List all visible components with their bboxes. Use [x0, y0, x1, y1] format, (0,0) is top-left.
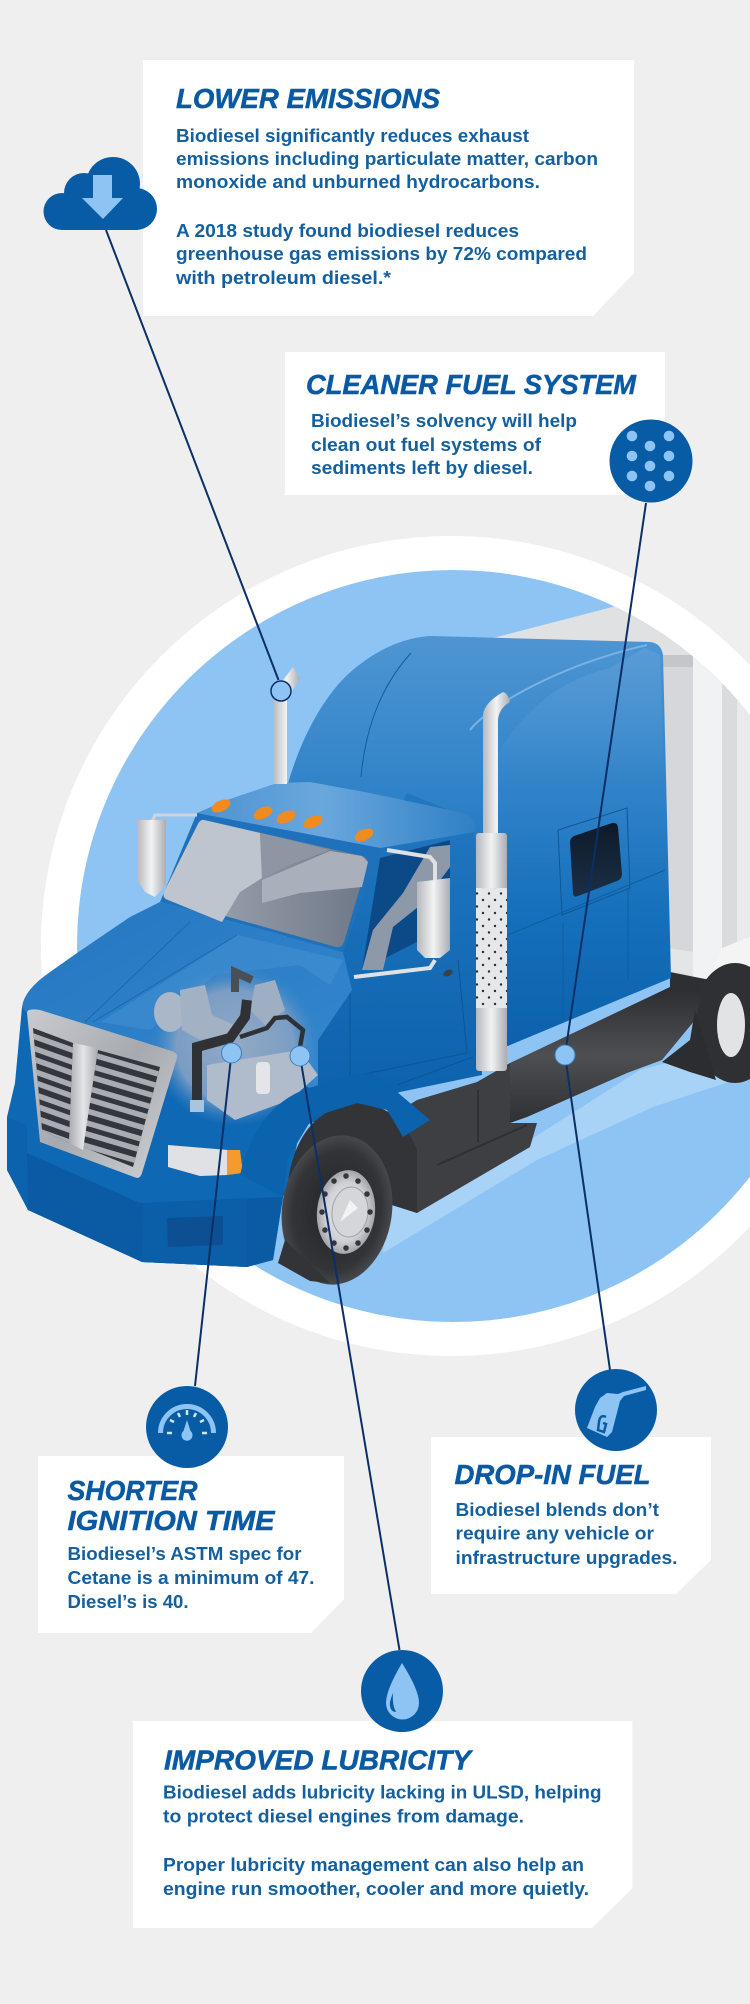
body text: monoxide and unburned hydrocarbons. — [176, 171, 540, 192]
body text: with petroleum diesel.* — [175, 267, 392, 288]
cab side — [300, 793, 482, 1127]
door window — [362, 840, 450, 970]
body text — [68, 1543, 314, 1612]
body text: Proper lubricity management can also help an — [163, 1854, 584, 1875]
heading: CLEANER FUEL SYSTEM — [306, 369, 637, 400]
wheel well — [287, 1103, 417, 1213]
engine cutaway — [151, 966, 319, 1126]
body text — [175, 125, 598, 288]
panel: drop-in fuel — [431, 1437, 711, 1594]
body text — [163, 1782, 602, 1899]
panel: improved lubricity — [133, 1721, 632, 1928]
heading: DROP-IN FUEL — [454, 1459, 650, 1490]
door handle — [442, 968, 454, 978]
windshield frame — [160, 813, 380, 952]
truck illustration — [7, 605, 750, 1292]
icon: cloud with down arrow — [44, 157, 157, 230]
amber cab lights — [210, 797, 375, 844]
right mirror — [354, 850, 450, 977]
sleeper panel lines — [361, 653, 665, 1020]
sleeper highlight line — [470, 645, 647, 730]
trailer and rear wheel — [493, 605, 750, 1083]
body text: Diesel’s is 40. — [68, 1591, 188, 1612]
icon: oil drop — [361, 1650, 443, 1732]
rear fairing — [662, 1010, 716, 1080]
heading: IMPROVED LUBRICITY — [164, 1744, 473, 1776]
bumper — [7, 1117, 283, 1267]
sleeper window — [558, 808, 630, 915]
body text: Biodiesel’s solvency will help — [311, 410, 577, 431]
cab roof — [197, 782, 475, 848]
heading: SHORTER — [68, 1475, 198, 1506]
leader line: drop-in fuel — [565, 1055, 610, 1370]
body text: infrastructure upgrades. — [456, 1547, 678, 1568]
body text: A 2018 study found biodiesel reduces — [176, 220, 519, 241]
body text: Biodiesel’s ASTM spec for — [68, 1543, 302, 1564]
door lines — [350, 960, 473, 1085]
sleeper highlight — [500, 648, 664, 780]
ground reflection — [383, 1063, 728, 1253]
grille — [27, 1009, 177, 1180]
body text: emissions including particulate matter, carbon — [176, 148, 598, 169]
body text: to protect diesel engines from damage. — [163, 1805, 524, 1826]
chassis step — [385, 1063, 537, 1213]
hood crease — [85, 922, 237, 1022]
marker: engine ignition — [222, 1043, 242, 1063]
panel: lower emissions — [143, 60, 634, 316]
fender — [240, 1073, 430, 1197]
front wheel — [272, 1128, 402, 1292]
icon: fuel nozzle — [575, 1369, 657, 1451]
body text: Biodiesel significantly reduces exhaust — [176, 125, 529, 146]
leader line: lubricity — [300, 1056, 400, 1650]
marker: exhaust — [271, 681, 291, 701]
hood light section — [100, 935, 343, 1030]
leader line: emissions — [106, 230, 278, 680]
body text: engine run smoother, cooler and more quietly. — [163, 1878, 589, 1899]
body text: Biodiesel adds lubricity lacking in ULSD, helping — [163, 1782, 602, 1803]
big exhaust stack — [476, 692, 510, 1071]
nose panel — [7, 1007, 318, 1267]
body text: require any vehicle or — [456, 1522, 654, 1544]
body text — [311, 410, 577, 478]
body text: Cetane is a minimum of 47. — [68, 1567, 314, 1588]
blue circle — [77, 570, 750, 1322]
heading: IGNITION TIME — [68, 1505, 276, 1536]
body text — [456, 1499, 678, 1568]
white ring — [41, 536, 750, 1356]
panel: cleaner fuel system — [285, 352, 665, 495]
headlight — [168, 1145, 243, 1176]
windshield — [164, 820, 368, 947]
small exhaust stack — [273, 667, 300, 784]
icon: gauge — [146, 1386, 228, 1468]
hood — [22, 902, 352, 1090]
leader line: fuel system — [565, 503, 646, 1055]
body text: clean out fuel systems of — [311, 434, 542, 455]
body text: sediments left by diesel. — [311, 457, 533, 478]
sleeper — [287, 636, 671, 1092]
icon: sediment particles — [610, 420, 692, 502]
chassis seams — [437, 1090, 527, 1165]
marker: fuel tank — [555, 1045, 575, 1065]
left mirror — [137, 815, 197, 897]
body text: greenhouse gas emissions by 72% compared — [176, 243, 587, 264]
leader line: ignition — [195, 1053, 232, 1386]
heading: LOWER EMISSIONS — [176, 83, 440, 114]
body text: Biodiesel blends don’t — [456, 1499, 659, 1520]
marker: engine lubricity — [290, 1046, 310, 1066]
panel: shorter ignition time — [38, 1456, 344, 1633]
heading — [68, 1475, 276, 1536]
fuel tank — [510, 987, 702, 1123]
